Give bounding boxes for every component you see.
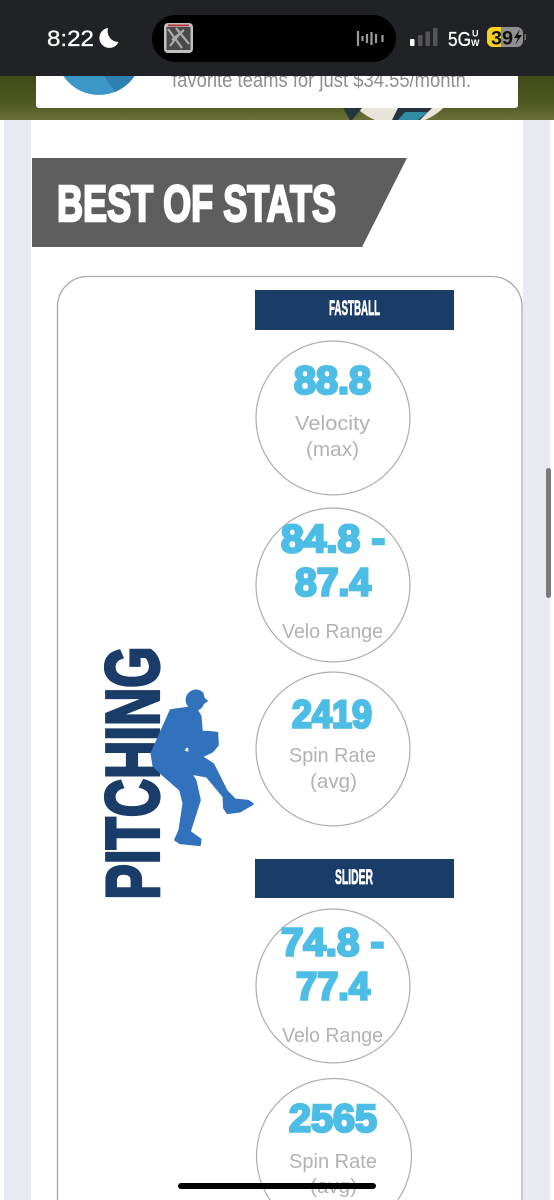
stat: fastball velo range: Velo Range — [282, 620, 383, 643]
stat: slider spin rate: 2565 — [289, 1098, 377, 1141]
stat: fastball spin rate: Spin Rate — [289, 744, 376, 767]
stat: velocity max: Velocity — [295, 412, 371, 435]
header: fastball — [255, 290, 454, 330]
audio waveform — [358, 31, 382, 46]
stat: fastball velo range: 84.8 - — [281, 518, 385, 561]
stat: velocity max: (max) — [306, 438, 359, 461]
advertisement banner — [0, 76, 554, 120]
battery: 39 — [491, 28, 513, 50]
dynamic island — [152, 15, 396, 62]
stat: fastball velo range — [256, 508, 410, 662]
title banner — [32, 158, 407, 247]
network label: U — [472, 28, 478, 38]
battery — [487, 27, 526, 50]
ad logo circle — [63, 76, 135, 95]
stat: fastball spin rate: 2419 — [292, 694, 372, 737]
network label: 5G — [448, 29, 471, 51]
icon: moon — [99, 28, 118, 48]
stat: slider velo range: 74.8 - — [281, 922, 384, 965]
scrollbar — [546, 468, 551, 598]
network label: W — [471, 38, 480, 48]
clock: 8:22 — [47, 26, 94, 51]
header: slider: SLIDER — [335, 866, 373, 889]
home indicator — [178, 1183, 376, 1189]
stat: velocity max: 88.8 — [294, 360, 371, 403]
album thumbnail — [164, 23, 193, 53]
stat: slider spin rate: Spin Rate — [289, 1150, 377, 1173]
stat: fastball spin rate: (avg) — [310, 770, 357, 793]
stat: slider velo range: 77.4 — [296, 966, 370, 1009]
header: slider — [255, 859, 454, 898]
icon: pitcher silhouette — [151, 690, 253, 845]
stat: slider spin rate: (avg) — [310, 1175, 357, 1198]
stat: slider spin rate — [256, 1078, 412, 1200]
phone status bar — [0, 0, 554, 76]
header: fastball: FASTBALL — [329, 297, 380, 320]
stat: fastball spin rate — [256, 672, 410, 826]
ad text: favorite teams for just $34.55/month. — [172, 69, 471, 92]
title: BEST OF STATS — [57, 175, 336, 232]
stat: slider velo range — [256, 909, 410, 1063]
soccer ball — [343, 108, 444, 120]
stat: slider velo range: Velo Range — [282, 1024, 383, 1047]
vertical heading: pitching: PITCHING — [91, 647, 175, 900]
stat: fastball velo range: 87.4 — [295, 562, 371, 605]
stat: velocity max — [256, 341, 410, 495]
signal bars — [410, 28, 438, 46]
panel: pitching stats — [58, 276, 522, 1200]
